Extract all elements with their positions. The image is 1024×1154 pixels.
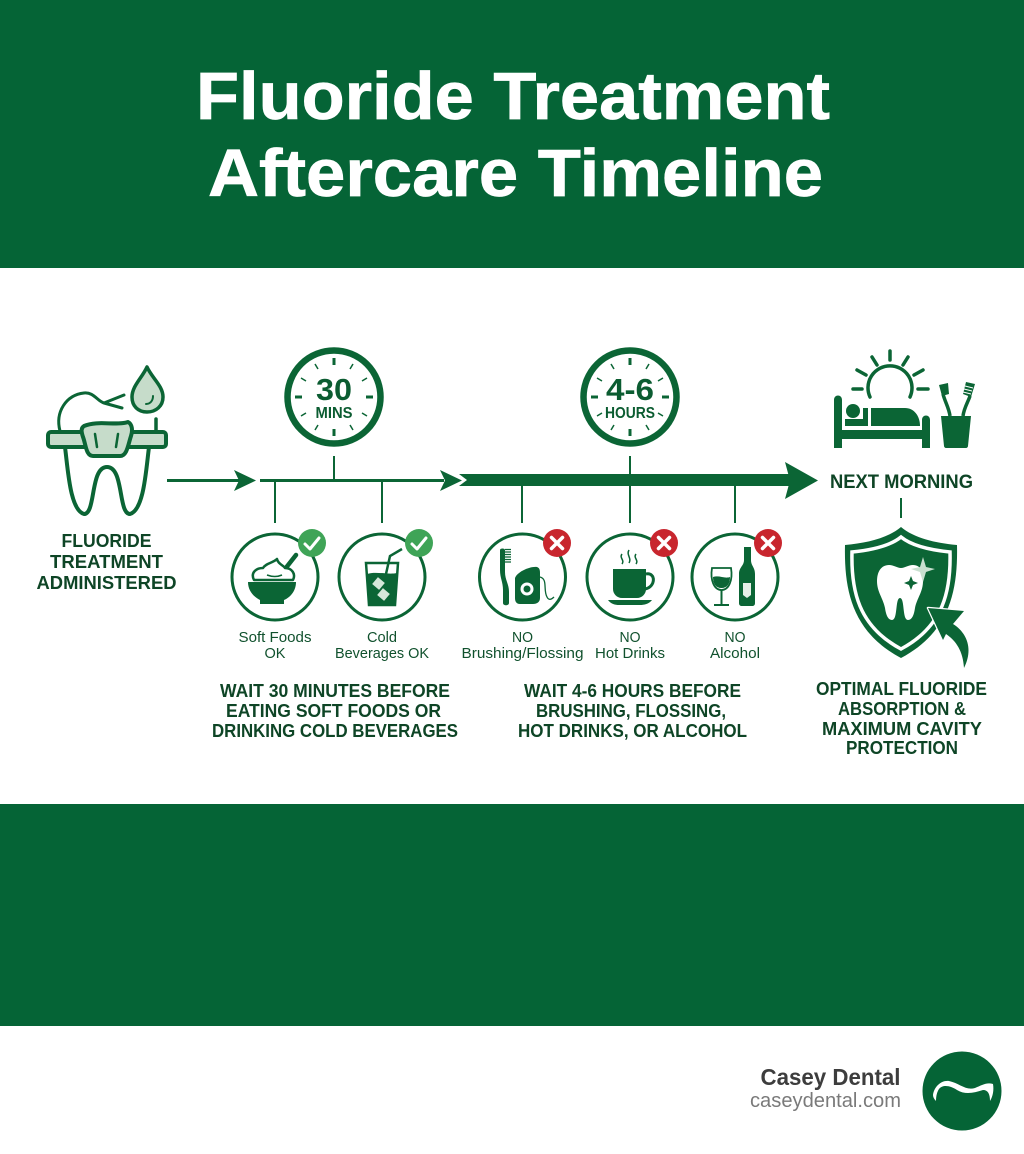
footer brand text: Casey Dental (760, 1064, 900, 1090)
icon: cold drink with straw (366, 549, 402, 605)
item: no alcohol (692, 529, 782, 662)
text block: outcome: MAXIMUM CAVITY (822, 718, 983, 739)
label: NO (724, 629, 746, 646)
arrow: treatment to first stage (167, 470, 256, 491)
text block: 30 minute instruction: DRINKING COLD BEVERAGES (212, 720, 458, 741)
label (238, 629, 312, 662)
icon: toothbrush and floss (500, 548, 554, 605)
label (462, 629, 584, 662)
icon: 4-6 hour clock: HOURS (605, 405, 655, 422)
label: Beverages OK (335, 645, 429, 662)
title: Fluoride Treatment (196, 59, 830, 134)
icon: 4-6 hour clock (584, 350, 676, 444)
arrow: 4-6 hour stage timeline (459, 456, 818, 523)
title: Aftercare Timeline (208, 136, 823, 211)
item: no hot drinks (587, 529, 678, 662)
text block: 4-6 hour instruction: BRUSHING, FLOSSING, (536, 700, 726, 721)
label: Hot Drinks (595, 645, 665, 662)
badge: check (298, 529, 326, 557)
label (335, 629, 429, 662)
icon: wine glass and bottle (711, 547, 755, 606)
icon: tooth with fluoride tray and drop (48, 367, 166, 514)
icon: 30 minute clock: 30 (316, 372, 352, 407)
text block: 30 minute instruction (212, 680, 458, 741)
badge: cross (754, 529, 782, 557)
label: next morning: NEXT MORNING (830, 472, 973, 493)
text block: outcome: PROTECTION (846, 737, 958, 758)
text block: outcome: ABSORPTION & (838, 698, 966, 719)
text block: 4-6 hour instruction: WAIT 4-6 HOURS BEFORE (524, 680, 741, 701)
icon: 4-6 hour clock: 4-6 (606, 372, 654, 407)
icon: bowl of soft food (248, 555, 296, 604)
icon: steaming coffee cup (608, 550, 653, 605)
text block: 4-6 hour instruction: HOT DRINKS, OR ALCOHOL (518, 720, 747, 741)
header band with title (0, 0, 1024, 268)
icon: 30 minute clock (288, 350, 380, 444)
label: fluoride treatment administered (36, 530, 176, 593)
badge: cross (650, 529, 678, 557)
item: no brushing or flossing (462, 529, 584, 662)
label: fluoride treatment administered: TREATMENT (50, 551, 164, 572)
title (196, 59, 830, 211)
label: Soft Foods (238, 629, 312, 646)
label: fluoride treatment administered: FLUORIDE (62, 530, 152, 551)
footer brand text (750, 1064, 901, 1112)
icon: shield with tooth and arrow (845, 527, 968, 668)
label: fluoride treatment administered: ADMINISTERED (36, 572, 176, 593)
empty green band (0, 804, 1024, 1026)
label: NO (620, 629, 640, 646)
label: OK (264, 645, 286, 662)
label (710, 629, 760, 662)
logo (922, 1052, 1002, 1130)
text block: outcome: OPTIMAL FLUORIDE (816, 678, 987, 699)
label (595, 629, 665, 662)
icon: sunrise, bed and toothbrushes (834, 351, 975, 448)
label: Cold (367, 629, 397, 646)
text block: outcome (816, 678, 987, 758)
label: NO (512, 629, 533, 646)
item: cold beverages ok (335, 529, 433, 662)
arrow: 30 minute stage timeline (260, 456, 462, 523)
text block: 4-6 hour instruction (518, 680, 747, 741)
badge: check (405, 529, 433, 557)
label: Alcohol (710, 645, 760, 662)
icon: 30 minute clock: MINS (316, 405, 353, 422)
text block: 30 minute instruction: WAIT 30 MINUTES BEFORE (220, 680, 450, 701)
badge: cross (543, 529, 571, 557)
label: Brushing/Flossing (462, 645, 584, 662)
text block: 30 minute instruction: EATING SOFT FOODS OR (226, 700, 441, 721)
connector: next morning to shield (900, 498, 902, 518)
item: soft foods ok (232, 529, 326, 662)
footer brand text: caseydental.com (750, 1090, 901, 1112)
